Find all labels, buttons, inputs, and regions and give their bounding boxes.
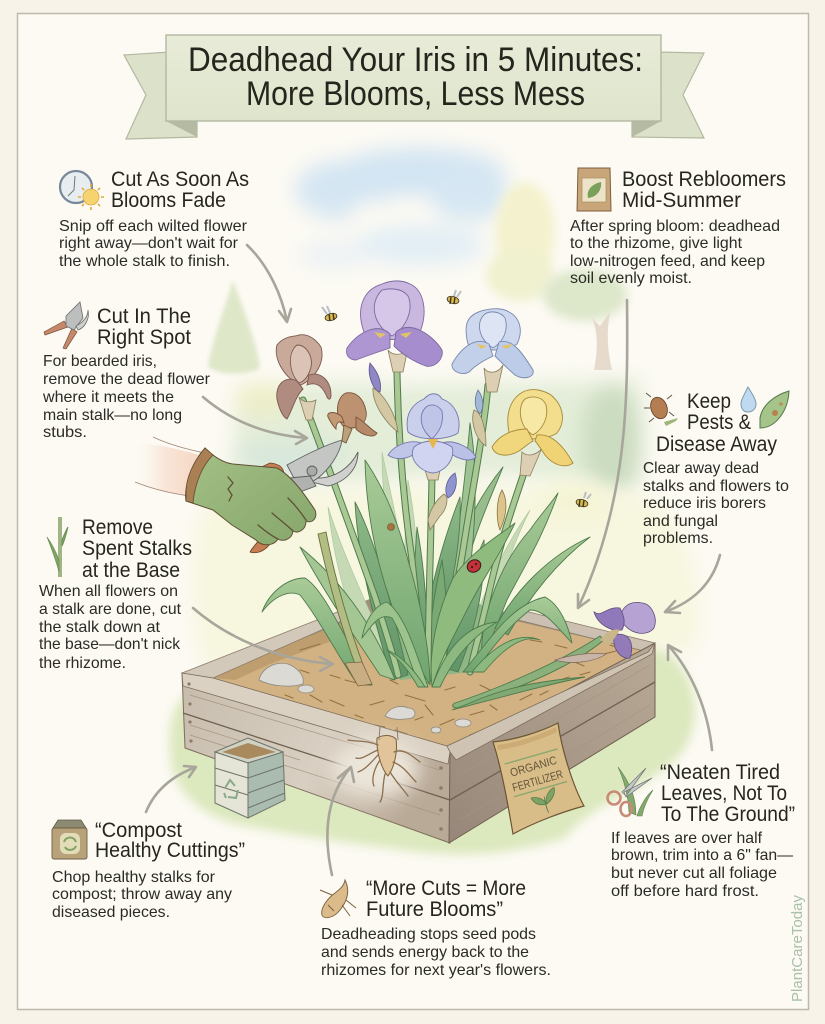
sky washes [295,148,510,269]
callout: compost healthy cuttings [52,818,245,921]
sheaths [299,348,542,480]
icon: beetle [644,393,678,426]
title text: Deadhead Your Iris in 5 Minutes: [188,41,643,79]
rhizome cutaway [348,726,420,802]
callout arrows [146,245,720,875]
pruner handle rear [255,463,284,482]
callout: neaten tired leaves: To The Ground” [661,802,795,826]
arrow: keep pests away [665,555,720,613]
front left face [182,673,450,843]
glow behind rhizome [330,738,420,798]
front leaves [262,460,590,687]
callout: remove spent stalks: a stalk are done, cut [39,601,182,618]
callout: compost healthy cuttings: compost; throw away any [52,886,232,903]
callout: cut in the right spot [42,302,210,441]
callout: more cuts more future blooms: “More Cuts = More [366,876,526,900]
left ribbon tail [124,52,197,139]
callout: keep pests and disease away: stalks and flowers to [643,478,789,495]
callout: more cuts more future blooms: Future Blooms” [366,897,503,921]
cypress shrub [208,280,260,374]
callout: compost healthy cuttings: Chop healthy stalks for [52,869,215,886]
callout: compost healthy cuttings: “Compost [95,818,182,842]
icon: pruners [44,302,88,349]
forearm [135,442,208,496]
callout: remove spent stalks: the rhizome. [39,655,126,672]
callout: boost rebloomers: soil evenly moist. [570,270,692,287]
callout: more cuts more future blooms [320,876,551,979]
callout: cut in the right spot: main stalk—no long [43,407,182,424]
callout: neaten tired leaves: but never cut all foliage [611,865,777,882]
raised garden bed [182,589,655,843]
flower: yellow iris [492,390,573,466]
back rim [182,607,362,678]
fertilizer bag: ORGANIC [509,755,558,780]
iris plant [262,281,590,687]
callout: boost rebloomers: Mid-Summer [622,188,741,212]
callout: compost healthy cuttings: diseased pieces. [52,904,170,921]
icon: scissors and leaves [608,767,653,816]
icon: water drop [741,387,756,412]
callout: cut as soon as blooms fade: Blooms Fade [111,188,226,212]
callout: cut in the right spot: where it meets the [42,389,174,406]
back leaves [328,452,530,670]
front right face [449,643,655,843]
callout: cut in the right spot: Cut In The [97,304,191,328]
callout: keep pests and disease away: Keep [687,389,731,413]
callout: remove spent stalks: Remove [82,515,153,539]
callout: remove spent stalks [39,515,192,672]
bed interior [182,589,655,752]
callout: remove spent stalks: at the Base [82,558,180,582]
arrow: boost rebloomers [578,300,627,608]
callout: cut as soon as blooms fade: Cut As Soon As [111,167,249,191]
cut stalk [318,532,365,672]
callout: boost rebloomers: to the rhizome, give light [570,235,743,252]
icon: clock and sun [60,171,104,210]
flower: small shrivelled brown iris [328,393,377,443]
callout: keep pests and disease away: problems. [643,530,713,547]
arrow: neaten tired leaves [668,645,712,750]
flower: pale blue iris [452,309,533,378]
callout: neaten tired leaves: “Neaten Tired [660,760,780,784]
fertilizer bag: FERTILIZER [511,769,564,795]
callout: compost healthy cuttings: Healthy Cuttings” [95,838,245,862]
callout: more cuts more future blooms: Deadheading stops seed pods [321,926,536,943]
icon: spent stalk [47,517,68,577]
callout: keep pests and disease away: Clear away dead [643,460,759,477]
bees [322,290,591,508]
title banner: More Blooms, Less Mess [246,75,585,113]
callout: keep pests and disease away: Disease Away [656,432,777,456]
fallen stalk with faded flower [452,602,655,710]
arrow: cut as soon as blooms fade [247,245,291,322]
icon: rhizome [320,880,356,918]
callout: cut as soon as blooms fade: Snip off each wilted flower [59,218,247,235]
callout: neaten tired leaves: brown, trim into a 6" fan— [611,847,793,864]
callout: cut as soon as blooms fade: the whole stalk to finish. [59,253,230,270]
compost bin [215,738,285,818]
flower: purple iris [347,281,442,366]
icon: compost pail [52,820,87,859]
callout: boost rebloomers: After spring bloom: deadhead [570,218,780,235]
callout: keep pests and disease away: Pests & [687,410,751,434]
grass under bed [169,650,695,855]
callout: cut in the right spot: For bearded iris, [43,353,157,370]
stones [259,663,471,733]
pruner blades [287,440,342,484]
right ribbon tail [632,52,704,138]
arrow: cut in the right spot [203,397,307,444]
callout: remove spent stalks: Spent Stalks [82,536,192,560]
callout: keep pests and disease away: and fungal [643,513,718,530]
callout: cut in the right spot: stubs. [43,424,87,441]
arrow: compost cuttings [146,766,196,812]
callout: remove spent stalks: the stalk down at [39,619,161,636]
icon: fertilizer sack [577,168,611,211]
callout: boost rebloomers: Boost Rebloomers [622,167,786,191]
plank seams [183,682,655,800]
callout: cut as soon as blooms fade: right away—don't wait for [59,235,238,252]
callout: more cuts more future blooms: and sends energy back to the [321,944,529,961]
lawn [194,488,698,670]
callout: neaten tired leaves: Leaves, Not To [661,781,787,805]
background tree [486,182,627,370]
banner panel [166,35,661,121]
callout: neaten tired leaves: If leaves are over half [611,830,763,847]
callout: cut as soon as blooms fade [59,167,249,270]
main garden illustration [135,148,698,855]
callout: neaten tired leaves: off before hard frost. [611,883,759,900]
callout: keep pests and disease away: reduce iris borers [643,495,766,512]
stems [303,372,525,680]
callout: boost rebloomers: low-nitrogen feed, and keep [570,253,765,270]
foliage mass [388,593,489,680]
icon: spotted leaf [760,391,789,428]
callout: cut in the right spot: Right Spot [97,325,191,349]
callout: cut in the right spot: remove the dead flower [43,371,210,388]
callout: neaten tired leaves [608,760,795,900]
soil [213,604,648,746]
hedge band [230,380,642,495]
callout: more cuts more future blooms: rhizomes for next year's flowers. [321,962,551,979]
ladybug [465,557,483,575]
arrow: remove spent stalks [193,608,333,671]
fertilizer bag [493,723,584,834]
callout: remove spent stalks: the base—don't nick [39,636,180,653]
callout: remove spent stalks: When all flowers on [39,583,178,600]
gloved hand with pruners [135,437,358,553]
callout: boost rebloomers [570,167,786,287]
arrow: more cuts more blooms [327,767,354,875]
glove [186,448,316,545]
flower: front blue iris [388,394,476,473]
top rim strips [182,673,450,764]
buds [369,363,506,530]
flower: large faded brown iris [276,335,331,419]
title banner [124,35,704,139]
recycling symbol [224,780,238,798]
callout: keep pests and disease away [643,387,789,547]
watermark: PlantCareToday [790,894,806,1002]
